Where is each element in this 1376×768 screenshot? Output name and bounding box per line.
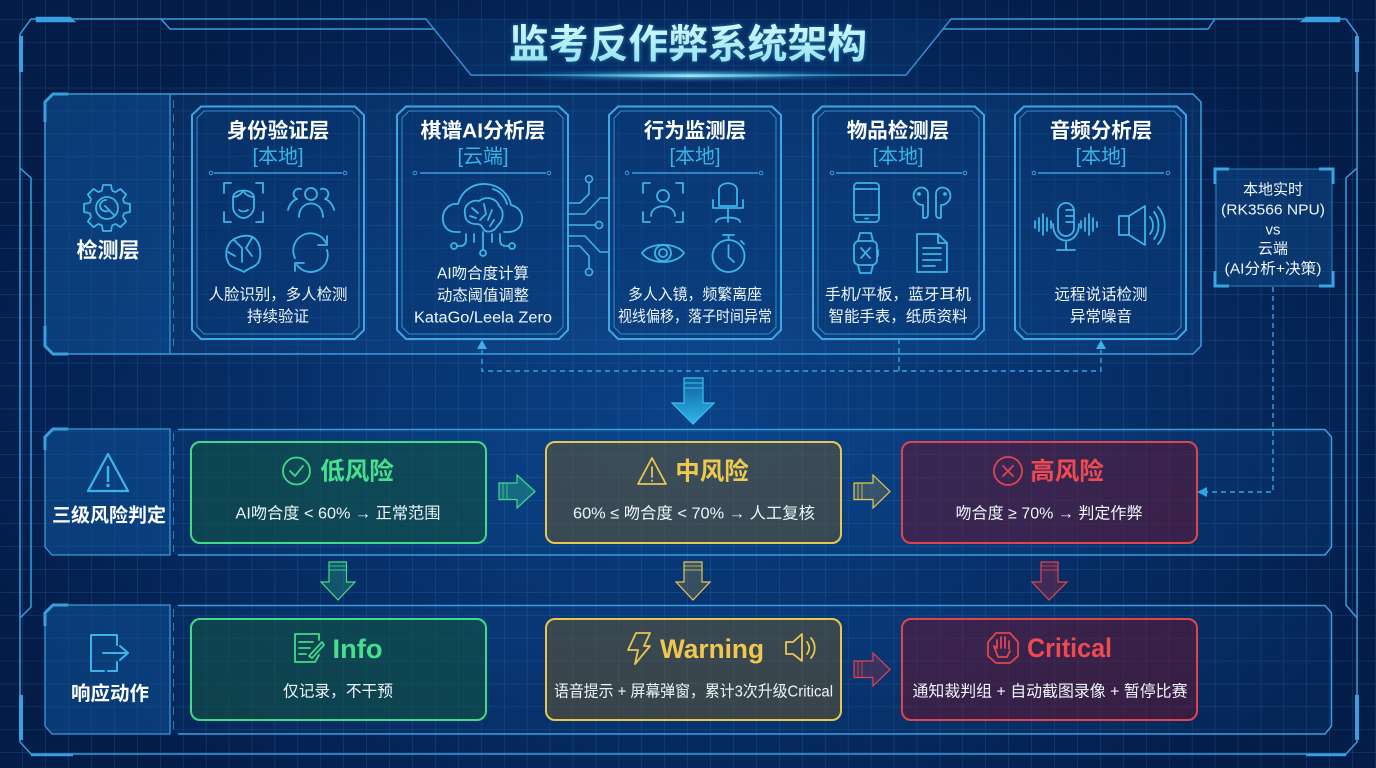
box: critical: 通知裁判组 + 自动截图录像 + 暂停比赛 bbox=[912, 682, 1188, 700]
icon: earbuds bbox=[914, 187, 950, 218]
icon: check circle bbox=[283, 458, 310, 484]
icon: note edit bbox=[295, 634, 324, 662]
callout: local vs cloud: vs bbox=[1266, 222, 1280, 238]
card: behaviour: 行为监测层 bbox=[644, 120, 746, 142]
card: behaviour: 视线偏移，落子时间异常 bbox=[618, 308, 772, 326]
icon: face scan bbox=[224, 183, 263, 222]
card: behaviour: [本地] bbox=[669, 145, 721, 168]
label box: risk bbox=[45, 429, 174, 555]
box: warning bbox=[546, 619, 841, 720]
box: info bbox=[191, 619, 486, 720]
icon: chair bbox=[713, 183, 743, 222]
title: 监考反作弊系统架构 bbox=[509, 23, 867, 67]
label box: detection bbox=[45, 94, 174, 354]
box: medium risk bbox=[546, 442, 841, 543]
icon: stopwatch bbox=[712, 235, 744, 272]
card: game record AI: [云端] bbox=[457, 145, 509, 168]
dashed connectors bbox=[477, 339, 1106, 371]
icon: eye bbox=[642, 245, 684, 262]
box: critical bbox=[902, 619, 1197, 720]
card: object bbox=[813, 106, 984, 339]
panel: response action bbox=[45, 605, 1332, 734]
circuit connector bbox=[568, 176, 609, 276]
label box: response bbox=[45, 605, 174, 734]
icon: refresh bbox=[293, 233, 328, 272]
card: audio: 远程说话检测 bbox=[1054, 286, 1148, 304]
icon: phone bbox=[854, 183, 879, 222]
icon: cloud brain bbox=[443, 184, 522, 256]
box: low risk: AI吻合度 < 60% → 正常范围 bbox=[236, 504, 440, 522]
callout: local vs cloud: (AI分析+决策) bbox=[1224, 260, 1322, 278]
panel: risk level bbox=[45, 429, 1332, 555]
card: audio bbox=[1015, 106, 1186, 339]
box: warning: 语音提示 + 屏幕弹窗，累计3次升级Critical bbox=[554, 682, 833, 700]
card: identity bbox=[192, 106, 364, 339]
callout: local vs cloud: (RK3566 NPU) bbox=[1221, 202, 1325, 218]
card: audio: 音频分析层 bbox=[1050, 118, 1152, 142]
card: audio: 异常噪音 bbox=[1070, 308, 1132, 326]
icon: person scan bbox=[643, 183, 683, 222]
callout: local vs cloud bbox=[1215, 169, 1333, 286]
icon: people bbox=[288, 188, 334, 217]
card: game record AI: 棋谱AI分析层 bbox=[420, 120, 546, 142]
box: warning: Warning bbox=[660, 634, 764, 664]
callout: local vs cloud: 云端 bbox=[1258, 240, 1288, 258]
dashed connector: callout to high risk bbox=[1197, 287, 1273, 497]
label box: risk: 三级风险判定 bbox=[52, 504, 166, 526]
icon: cross circle bbox=[994, 457, 1022, 485]
card: game record AI: AI吻合度计算 bbox=[437, 264, 529, 282]
box: critical: Critical bbox=[1027, 633, 1112, 663]
arrow: medium to warning bbox=[676, 562, 710, 600]
arrow: high to critical bbox=[1032, 562, 1067, 600]
panel: detection layer bbox=[45, 94, 1201, 354]
icon: exit bbox=[91, 635, 128, 671]
label box: response: 响应动作 bbox=[71, 682, 149, 705]
card: identity: 身份验证层 bbox=[227, 118, 329, 142]
card: game record AI bbox=[397, 106, 568, 339]
card: identity: [本地] bbox=[252, 145, 304, 168]
icon: warning triangle bbox=[638, 458, 666, 484]
card: object: [本地] bbox=[872, 145, 924, 168]
card: behaviour bbox=[609, 106, 781, 339]
box: low risk: 低风险 bbox=[320, 458, 394, 486]
box: medium risk: 60% ≤ 吻合度 < 70% → 人工复核 bbox=[573, 504, 815, 522]
title bbox=[426, 19, 951, 78]
icon: warning bbox=[88, 454, 128, 491]
icon: document bbox=[917, 234, 947, 272]
icon: stop hand bbox=[988, 633, 1018, 663]
card: game record AI: 动态阈值调整 bbox=[437, 286, 529, 304]
card: identity: 持续验证 bbox=[247, 308, 309, 326]
box: high risk: 吻合度 ≥ 70% → 判定作弊 bbox=[956, 504, 1142, 522]
arrow: detection to risk bbox=[672, 378, 714, 424]
card: object: 智能手表，纸质资料 bbox=[828, 308, 968, 326]
box: info: 仅记录，不干预 bbox=[283, 682, 393, 700]
callout: local vs cloud: 本地实时 bbox=[1243, 182, 1303, 198]
icon: speaker bbox=[786, 634, 815, 661]
icon: microphone bbox=[1035, 203, 1097, 250]
card: audio: [本地] bbox=[1075, 145, 1127, 168]
box: medium risk: 中风险 bbox=[675, 458, 749, 486]
box: info: Info bbox=[332, 634, 382, 664]
card: game record AI: KataGo/Leela Zero bbox=[414, 310, 552, 326]
arrow: medium to high bbox=[854, 475, 890, 508]
card: identity: 人脸识别，多人检测 bbox=[208, 286, 348, 304]
card: object: 手机/平板，蓝牙耳机 bbox=[825, 286, 972, 304]
icon: head scan bbox=[226, 236, 260, 272]
icon: gear with wrench bbox=[84, 185, 130, 231]
icon: smartwatch bbox=[854, 233, 878, 273]
arrow: low to info bbox=[321, 562, 355, 600]
arrow: low to medium bbox=[499, 475, 535, 508]
arrow: warning to critical bbox=[854, 653, 890, 686]
icon: lightning bbox=[628, 633, 650, 664]
icon: speaker bbox=[1119, 206, 1165, 245]
label: detection layer: 检测层 bbox=[76, 238, 140, 262]
card: behaviour: 多人入镜，频繁离座 bbox=[628, 284, 762, 304]
box: high risk bbox=[902, 442, 1197, 543]
card: object: 物品检测层 bbox=[847, 118, 949, 142]
box: low risk bbox=[191, 442, 486, 543]
box: high risk: 高风险 bbox=[1030, 458, 1104, 486]
